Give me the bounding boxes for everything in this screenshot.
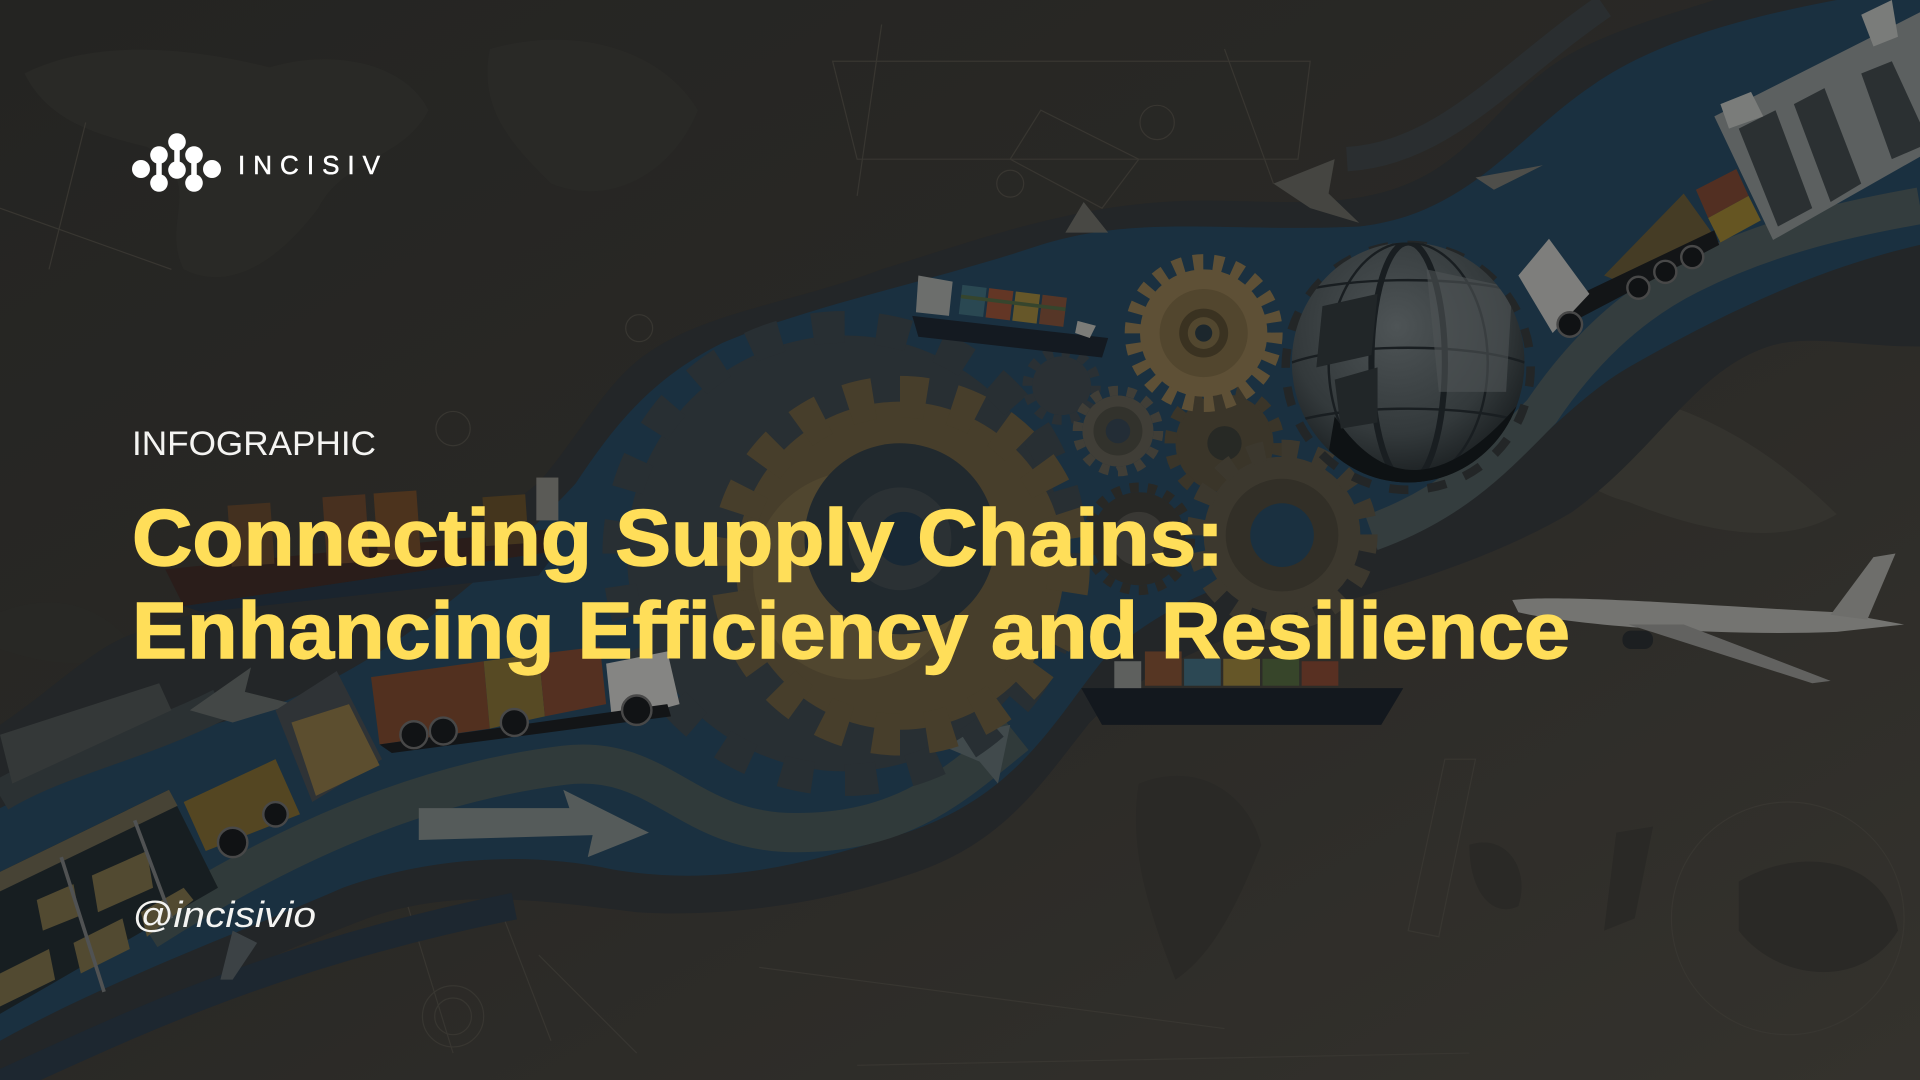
- airplane: [1512, 553, 1904, 683]
- gear: brown ring gear: [1196, 449, 1368, 621]
- truck: yellow crate trailer: [184, 671, 382, 857]
- gear: dark large back gear: [618, 327, 1071, 780]
- gear: dark small gear: [1027, 351, 1096, 420]
- social handle: @incisivio: [132, 894, 316, 935]
- warehouse building top right: [1714, 0, 1920, 240]
- gear: large tan gear: [731, 397, 1069, 735]
- arrows: flow direction: [0, 159, 1543, 980]
- eyebrow label: INFOGRAPHIC: [132, 425, 376, 463]
- truck: top right trailer truck: [1518, 169, 1761, 337]
- title: Enhancing Efficiency and Resilience: [132, 586, 1570, 675]
- ship: left container ship: [165, 478, 558, 612]
- truck: container truck: [371, 647, 680, 753]
- gear: tan upper gear: [1133, 262, 1275, 404]
- warehouse shelves bottom left: [0, 790, 218, 1014]
- globe made of warehouse imagery: [1286, 242, 1531, 490]
- ship: lower container ship: [1081, 651, 1403, 725]
- logo mark: [132, 133, 221, 192]
- gear: spoked gear: [1171, 389, 1278, 497]
- logo: Incisiv: [132, 133, 381, 192]
- logo wordmark: INCISIV: [238, 150, 381, 180]
- gear: dark meter gear: [1087, 487, 1190, 590]
- ship: top container ship: [912, 276, 1108, 358]
- gear: small grey gear: [1078, 391, 1158, 471]
- title: [132, 493, 1570, 675]
- title: Connecting Supply Chains:: [132, 493, 1224, 582]
